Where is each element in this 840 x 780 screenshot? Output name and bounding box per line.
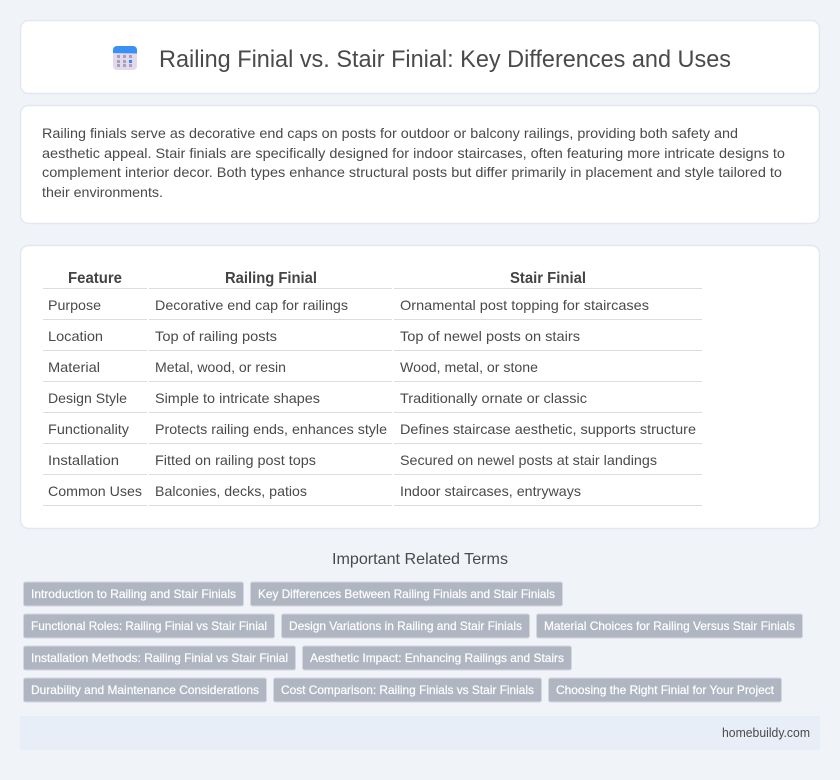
tag (24, 614, 274, 638)
tag: Material Choices for Railing Versus Stair Finials (544, 619, 795, 633)
table header (68, 270, 586, 287)
intro text block: Railing finials serve as decorative end caps on posts for outdoor or balcony railings, providing both safety and (42, 125, 738, 141)
tag (24, 678, 266, 702)
row: purpose: Ornamental post topping for staircases (400, 297, 649, 313)
intro text block: complement interior decor. Both types enhance structural posts but differ primarily in placement and style tailored to (42, 164, 782, 180)
heading: important related terms: Important Related Terms (332, 551, 508, 568)
tag (548, 678, 782, 702)
table header: Railing Finial (225, 270, 317, 287)
footer site name: homebuildy.com (722, 725, 810, 740)
tag: Aesthetic Impact: Enhancing Railings and Stairs (310, 651, 564, 665)
title: Railing Finial vs. Stair Finial: Key Differences and Uses (159, 46, 731, 73)
row: functionality: Defines staircase aesthetic, supports structure (400, 421, 696, 437)
row: material (48, 359, 538, 375)
row: purpose: Purpose (48, 297, 101, 313)
tag: Functional Roles: Railing Finial vs Stair Finial (31, 619, 267, 633)
tag (302, 646, 572, 670)
row: material: Metal, wood, or resin (155, 359, 286, 375)
row: design style: Design Style (48, 390, 127, 406)
tag (282, 614, 530, 638)
tag (250, 582, 562, 606)
row: material: Wood, metal, or stone (400, 359, 538, 375)
tag (536, 614, 802, 638)
intro text block (42, 125, 785, 200)
row: common uses (48, 483, 581, 499)
table header: Feature (68, 270, 122, 287)
row: functionality: Protects railing ends, enhances style (155, 421, 387, 437)
row: functionality (48, 421, 696, 437)
tag (24, 582, 244, 606)
tag: Key Differences Between Railing Finials and Stair Finials (258, 587, 555, 601)
row: purpose: Decorative end cap for railings (155, 297, 348, 313)
row: common uses: Balconies, decks, patios (155, 483, 307, 499)
intro text block: aesthetic appeal. Stair finials are specifically designed for indoor staircases, often featuring more intricate designs to (42, 145, 785, 161)
panel: header (20, 20, 820, 94)
panel: comparison table (20, 246, 820, 528)
row: installation (48, 452, 657, 468)
tag: Design Variations in Railing and Stair Finials (289, 619, 522, 633)
row: common uses: Common Uses (48, 483, 142, 499)
icon: calendar (113, 46, 137, 70)
row: location: Top of newel posts on stairs (400, 328, 580, 344)
tag: Durability and Maintenance Considerations (31, 683, 259, 697)
row: location: Location (48, 328, 103, 344)
tag: Introduction to Railing and Stair Finials (31, 587, 236, 601)
row: functionality: Functionality (48, 421, 129, 437)
row: location (48, 328, 580, 344)
row: installation: Fitted on railing post tops (155, 452, 316, 468)
row: installation: Secured on newel posts at stair landings (400, 452, 657, 468)
row: design style (48, 390, 587, 406)
row: common uses: Indoor staircases, entryways (400, 483, 581, 499)
table header: Stair Finial (510, 270, 586, 287)
row: purpose (48, 297, 649, 313)
tag (24, 646, 296, 670)
intro text block: their environments. (42, 184, 163, 200)
row: design style: Traditionally ornate or classic (400, 390, 587, 406)
tag (274, 678, 542, 702)
tag: Choosing the Right Finial for Your Project (556, 683, 775, 697)
tag: Cost Comparison: Railing Finials vs Stair Finials (281, 683, 534, 697)
footer (20, 716, 820, 750)
tag: Installation Methods: Railing Finial vs Stair Finial (31, 651, 288, 665)
row: design style: Simple to intricate shapes (155, 390, 320, 406)
panel: introduction (20, 106, 820, 224)
row: material: Material (48, 359, 100, 375)
row: location: Top of railing posts (155, 328, 277, 344)
tags list (24, 582, 802, 702)
row: installation: Installation (48, 452, 119, 468)
